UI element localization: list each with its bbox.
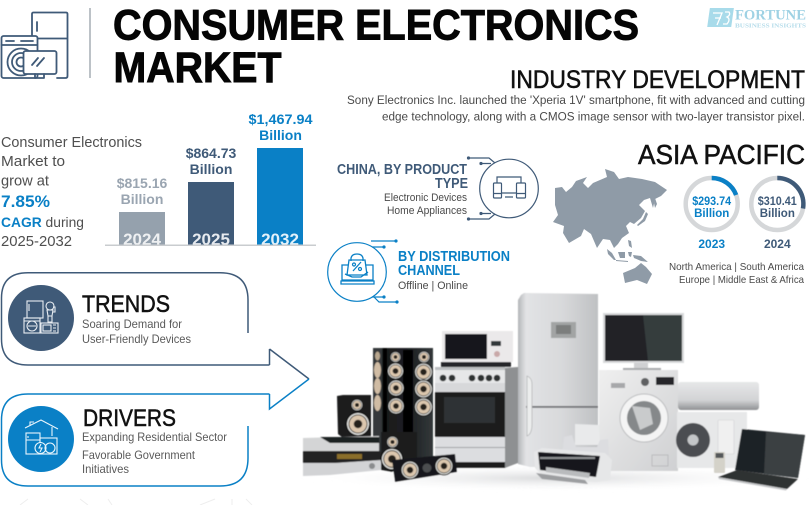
heading: by distribution channel (398, 249, 510, 279)
text block: drivers: Expanding Residential Sector (82, 431, 227, 444)
bar: 2032 (248, 111, 313, 249)
text block: CAGR statement: 2025-2032 (1, 234, 72, 250)
stereo receivers (303, 436, 381, 476)
centre speaker (392, 454, 457, 482)
text block: CAGR statement: 7.85% (1, 192, 50, 211)
callout: by distribution channel (328, 240, 510, 303)
oven (435, 362, 518, 468)
text block: channels: Offline | Online (398, 280, 468, 292)
icon: shopping laptop in circle (328, 240, 398, 303)
title (113, 2, 639, 92)
icon: appliances in circle (8, 285, 74, 351)
bar: 2032: $1,467.94 (248, 111, 313, 127)
heading: by distribution channel: CHANNEL (398, 263, 460, 279)
text block: CAGR statement: grow at (1, 174, 49, 190)
icon: smart home in circle (8, 406, 74, 472)
text block: CAGR statement: CAGR during (1, 214, 84, 230)
arrow outline: drivers (2, 379, 309, 486)
bar: 2024: 2024 (123, 230, 161, 249)
washing machine (599, 370, 678, 471)
bar: 2032: 2032 (261, 230, 299, 249)
text block: other regions: North America | South America (669, 261, 804, 273)
panel: drivers (2, 379, 309, 486)
donut: 2023: Billion (694, 208, 729, 220)
printer (534, 424, 612, 484)
panel: trends (2, 273, 309, 379)
bar: 2032: Billion (259, 127, 302, 143)
bookshelf speaker (337, 395, 371, 438)
text block: product types (384, 192, 467, 217)
laptop (718, 429, 805, 490)
bar: 2024 (117, 175, 168, 249)
bar: 2025: 2025 (192, 230, 230, 249)
text block: CAGR statement (1, 135, 142, 250)
text block: CAGR statement: Market to (1, 154, 65, 170)
bar: 2025: $864.73 (186, 145, 237, 161)
text block: trends: User-Friendly Devices (82, 333, 191, 346)
arrow outline: trends (2, 273, 309, 379)
donut: 2024: $310.41 (758, 196, 797, 208)
logo: Fortune Business Insights: BUSINESS INSIGHTS (735, 22, 806, 30)
text block: product types: Electronic Devices (384, 192, 467, 204)
heading: drivers: DRIVERS (83, 405, 176, 432)
text block: industry development (347, 93, 805, 124)
donut: 2023: 2023 (698, 237, 725, 251)
text block: product types: Home Appliances (387, 205, 467, 217)
decorative faint world outline (20, 499, 252, 505)
logo: Fortune Business Insights: FORTUNE (735, 8, 806, 24)
title: MARKET (114, 45, 282, 92)
bar chart: market size (105, 111, 316, 249)
header divider (89, 8, 91, 78)
header icon: appliances (2, 12, 68, 78)
donut: 2024: Billion (760, 208, 795, 220)
callout: China by product type (337, 157, 538, 220)
icon: devices in circle (468, 157, 538, 220)
map: Asia Pacific (553, 169, 667, 284)
tower speakers (373, 348, 433, 458)
donut: 2024: 2024 (764, 237, 791, 251)
text block: drivers (82, 431, 227, 476)
subwoofer (380, 432, 417, 472)
air conditioner (676, 382, 759, 473)
donut: 2024 (751, 178, 803, 251)
text block: CAGR statement: Consumer Electronics (1, 135, 142, 151)
logo: Fortune Business Insights (707, 8, 806, 30)
heading: Asia Pacific: ASIA PACIFIC (638, 139, 805, 170)
title: CONSUMER ELECTRONICS (113, 2, 639, 50)
text block: drivers: Favorable Government (82, 449, 196, 462)
bar: 2024: Billion (121, 191, 163, 207)
image: consumer electronics appliances group (300, 293, 810, 492)
donut: 2023: $293.74 (692, 196, 732, 208)
fridge (518, 293, 598, 467)
heading: China by product type (337, 162, 468, 192)
text block: drivers: Initiatives (82, 463, 129, 476)
microwave (442, 331, 513, 362)
television (603, 313, 684, 371)
bar: 2025 (186, 145, 237, 249)
donut: 2023 (686, 178, 738, 251)
heading: trends: TRENDS (82, 291, 170, 318)
heading: China by product type: TYPE (435, 176, 468, 192)
heading: by distribution channel: BY DISTRIBUTION (398, 249, 510, 265)
text block: trends (82, 318, 191, 346)
heading: China by product type: CHINA, BY PRODUCT (337, 162, 467, 178)
text block: trends: Soaring Demand for (82, 318, 182, 331)
bar: 2024: $815.16 (117, 175, 168, 191)
text block: other regions (669, 261, 804, 286)
bar: 2025: Billion (190, 161, 232, 177)
